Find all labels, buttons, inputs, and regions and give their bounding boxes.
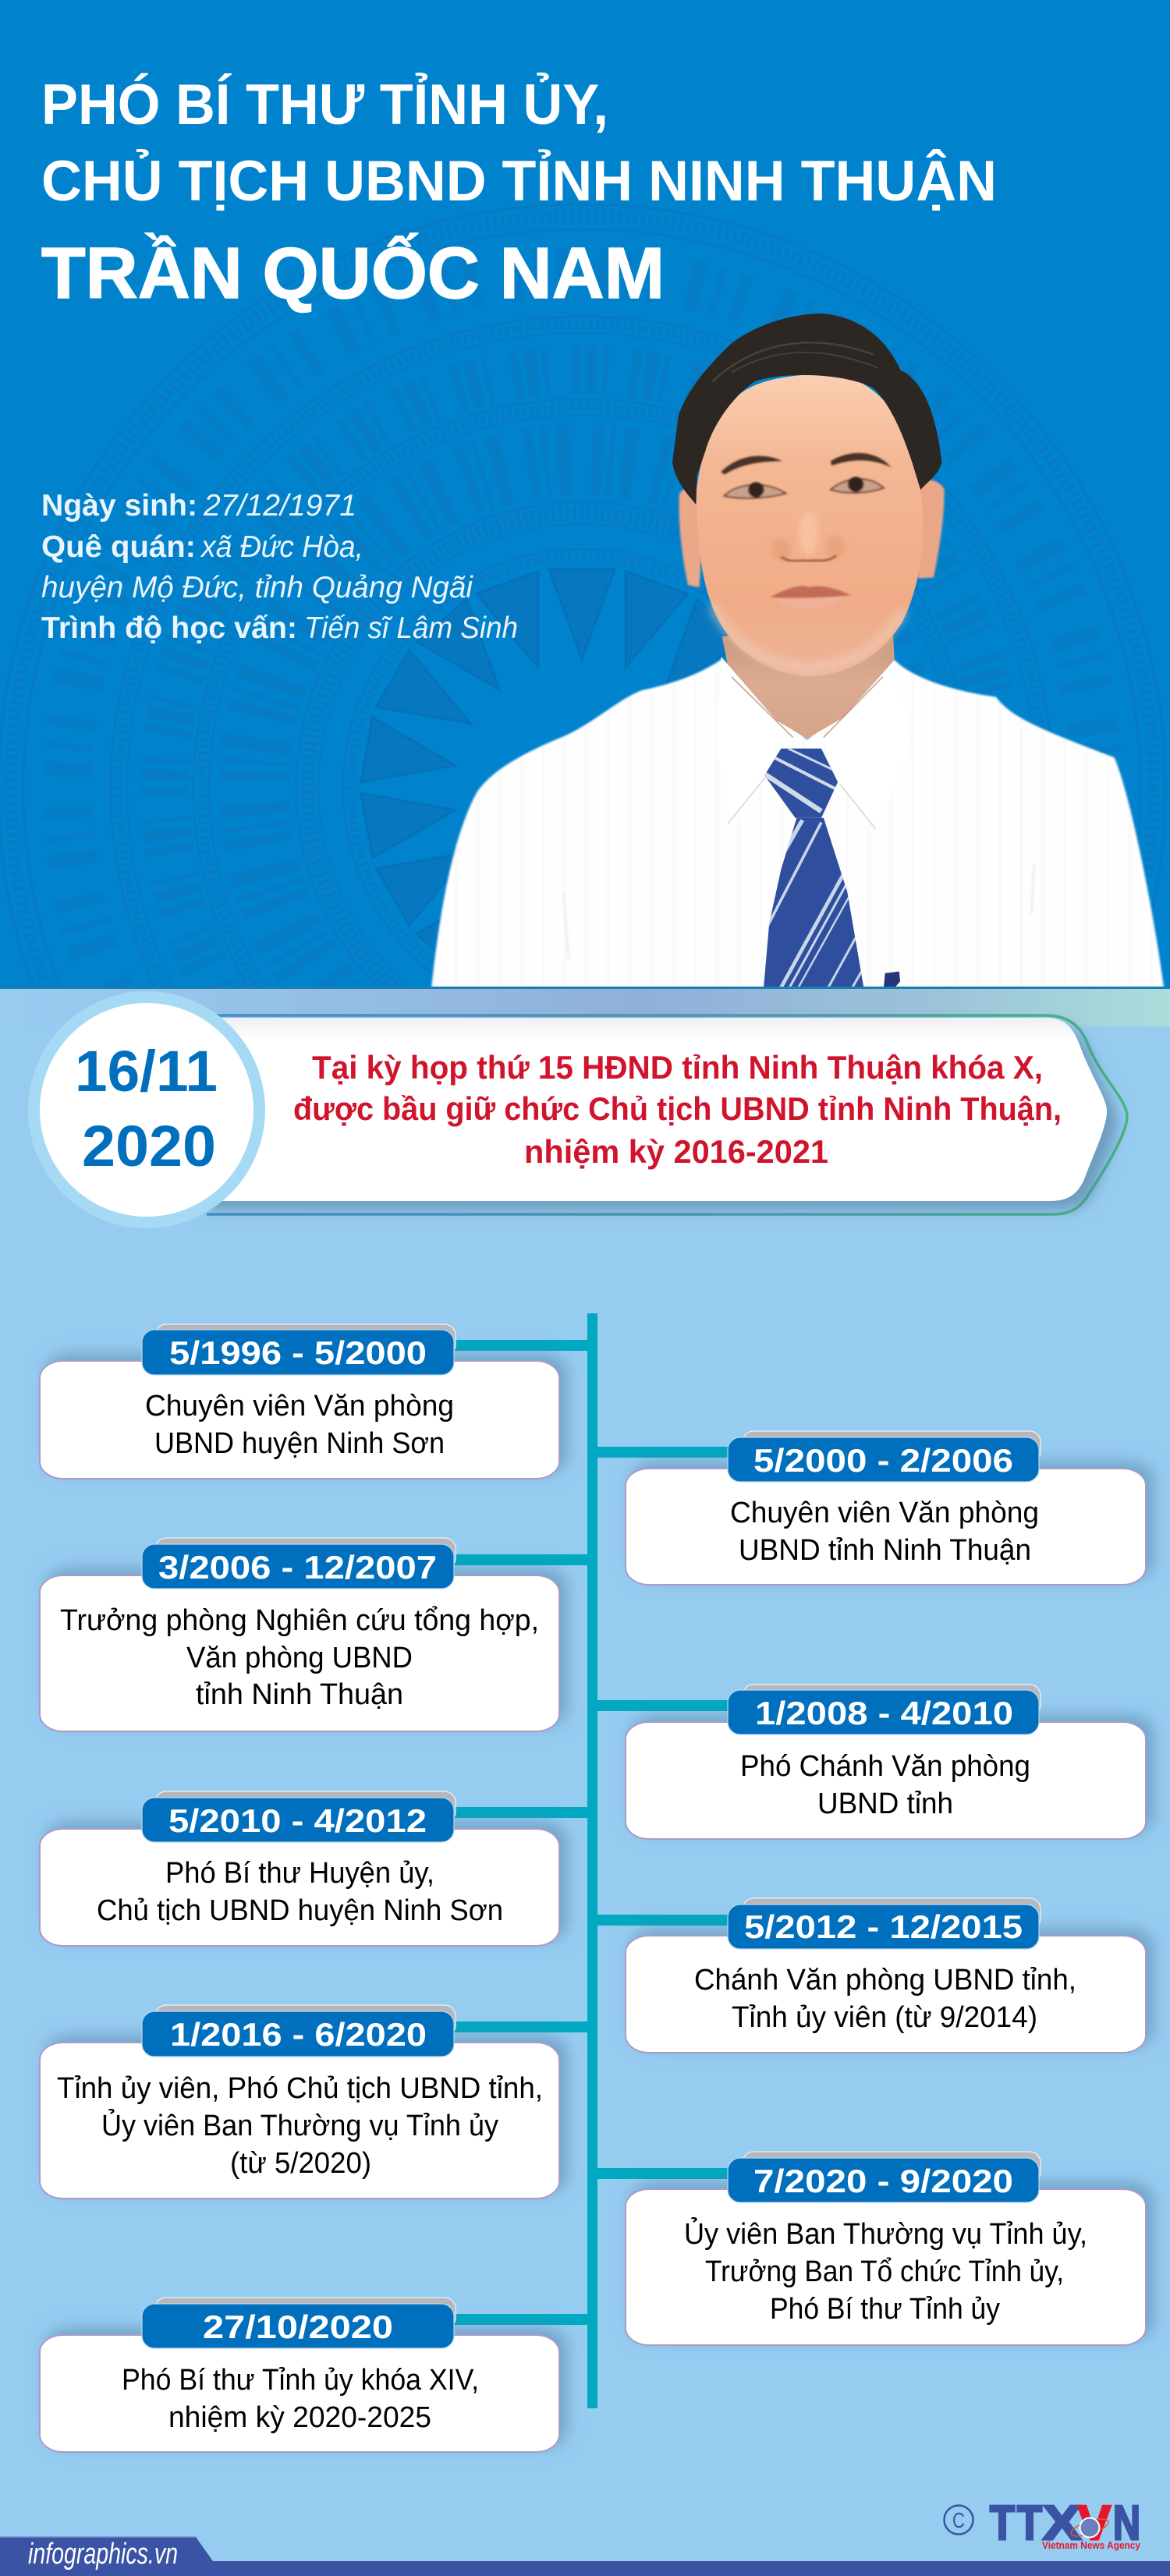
card: 5/2000 - 2/2006: Chuyên viên Văn phòng xyxy=(730,1497,1039,1529)
card: 1/2016 - 6/2020: (từ 5/2020) xyxy=(230,2147,371,2180)
card: 5/1996 - 5/2000 xyxy=(40,1324,559,1479)
card: 3/2006 - 12/2007: tỉnh Ninh Thuận xyxy=(196,1678,403,1711)
banner text: Tại kỳ họp thứ 15 HĐND tỉnh Ninh Thuận khóa X, xyxy=(312,1049,1043,1086)
card: 27/10/2020: nhiệm kỳ 2020-2025 xyxy=(168,2401,431,2434)
card: 1/2016 - 6/2020 xyxy=(40,2005,559,2199)
shirt xyxy=(431,659,1164,988)
card: 3/2006 - 12/2007: Trưởng phòng Nghiên cứu tổng hợp, xyxy=(60,1604,539,1637)
personal details: xã Đức Hòa, xyxy=(200,530,363,564)
agency letters xyxy=(990,2496,1140,2550)
card: 5/2010 - 4/2012: 5/2010 - 4/2012 xyxy=(168,1802,427,1839)
card: 7/2020 - 9/2020: 7/2020 - 9/2020 xyxy=(753,2163,1013,2199)
card: 1/2008 - 4/2010: 1/2008 - 4/2010 xyxy=(755,1695,1013,1731)
banner: election event xyxy=(28,991,1127,1228)
copyright mark xyxy=(944,2505,973,2535)
agency letters: T xyxy=(1017,2496,1042,2550)
bronze drum pattern xyxy=(0,203,1167,987)
card: 5/2000 - 2/2006: UBND tỉnh Ninh Thuận xyxy=(739,1534,1031,1567)
agency letters: T xyxy=(990,2496,1015,2550)
face xyxy=(697,374,923,677)
mouth xyxy=(770,586,850,608)
personal details: 27/12/1971 xyxy=(203,489,356,523)
card: 1/2016 - 6/2020: Tỉnh ủy viên, Phó Chủ tịch UBND tỉnh, xyxy=(57,2072,543,2105)
title xyxy=(41,73,997,314)
card: 7/2020 - 9/2020: Ủy viên Ban Thường vụ Tỉnh ủy, xyxy=(684,2216,1087,2251)
card: 1/2008 - 4/2010: UBND tỉnh xyxy=(817,1788,953,1820)
card: 7/2020 - 9/2020 xyxy=(626,2152,1146,2345)
card: 7/2020 - 9/2020: Phó Bí thư Tỉnh ủy xyxy=(770,2293,1000,2326)
hair xyxy=(672,314,941,505)
footer bar xyxy=(0,2537,1170,2576)
agency letters: X xyxy=(1043,2496,1081,2550)
card: 7/2020 - 9/2020: Trưởng Ban Tổ chức Tỉnh ủy, xyxy=(705,2255,1064,2288)
card: 5/2012 - 12/2015: Tỉnh ủy viên (từ 9/2014) xyxy=(732,2001,1037,2034)
title: CHỦ TỊCH UBND TỈNH NINH THUẬN xyxy=(41,150,997,213)
top band below header xyxy=(0,987,1170,1026)
date circle: 16/11 xyxy=(75,1039,218,1104)
globe xyxy=(1069,2516,1110,2539)
title: TRẦN QUỐC NAM xyxy=(41,232,665,314)
card: 5/2010 - 4/2012: Chủ tịch UBND huyện Ninh Sơn xyxy=(97,1894,503,1927)
personal details: Quê quán: xyxy=(41,530,196,564)
card: 5/2000 - 2/2006 xyxy=(626,1431,1146,1585)
header panel xyxy=(0,0,1170,987)
banner text xyxy=(293,1049,1062,1170)
card: 5/2012 - 12/2015 xyxy=(626,1898,1146,2053)
date circle: 2020 xyxy=(82,1114,216,1178)
footer bar: infographics.vn xyxy=(28,2538,178,2571)
eyebrows xyxy=(721,453,892,474)
personal details xyxy=(41,489,518,645)
card: 1/2016 - 6/2020: Ủy viên Ban Thường vụ Tỉnh ủy xyxy=(101,2108,498,2142)
portrait photo xyxy=(431,314,1164,1026)
card: 1/2008 - 4/2010: Phó Chánh Văn phòng xyxy=(740,1750,1030,1783)
ears xyxy=(679,480,945,587)
eyes xyxy=(725,477,884,498)
card: 27/10/2020: 27/10/2020 xyxy=(203,2308,393,2345)
nose xyxy=(771,512,845,562)
personal details: Ngày sinh: xyxy=(41,489,197,523)
card: 27/10/2020: Phó Bí thư Tỉnh ủy khóa XIV, xyxy=(122,2364,479,2397)
banner body xyxy=(195,1018,1107,1201)
card: 1/2008 - 4/2010 xyxy=(626,1685,1146,1839)
card: 5/1996 - 5/2000: Chuyên viên Văn phòng xyxy=(145,1390,454,1423)
logo: TTXVN: Vietnam News Agency xyxy=(1042,2539,1141,2551)
card: 5/2010 - 4/2012: Phó Bí thư Huyện ủy, xyxy=(165,1857,434,1890)
tie xyxy=(764,749,864,987)
agency letters: V xyxy=(1078,2496,1111,2550)
personal details: Tiến sĩ Lâm Sinh xyxy=(304,611,518,645)
card: 3/2006 - 12/2007 xyxy=(40,1538,559,1731)
agency letters: N xyxy=(1113,2496,1140,2550)
personal details: huyện Mộ Đức, tỉnh Quảng Ngãi xyxy=(41,571,473,604)
logo: TTXVN xyxy=(944,2496,1141,2551)
neck xyxy=(722,618,895,739)
banner outline xyxy=(207,1015,1127,1214)
card: 5/2012 - 12/2015: 5/2012 - 12/2015 xyxy=(744,1908,1023,1945)
personal details: Trình độ học vấn: xyxy=(41,611,297,645)
card: 3/2006 - 12/2007: Văn phòng UBND xyxy=(186,1642,413,1674)
banner text: nhiệm kỳ 2016-2021 xyxy=(524,1133,828,1170)
date circle xyxy=(28,991,265,1228)
card: 3/2006 - 12/2007: 3/2006 - 12/2007 xyxy=(158,1549,437,1586)
card: 5/2010 - 4/2012 xyxy=(40,1791,559,1946)
card: 1/2016 - 6/2020: 1/2016 - 6/2020 xyxy=(170,2016,427,2053)
card: 5/2000 - 2/2006: 5/2000 - 2/2006 xyxy=(753,1442,1013,1479)
card: 27/10/2020 xyxy=(40,2298,559,2452)
banner text: được bầu giữ chức Chủ tịch UBND tỉnh Ninh Thuận, xyxy=(293,1090,1062,1127)
card: 5/1996 - 5/2000: UBND huyện Ninh Sơn xyxy=(154,1427,445,1460)
pen xyxy=(884,972,900,988)
title: PHÓ BÍ THƯ TỈNH ỦY, xyxy=(41,73,608,136)
card: 5/1996 - 5/2000: 5/1996 - 5/2000 xyxy=(169,1334,427,1371)
copyright mark: C xyxy=(952,2508,965,2532)
timeline spine xyxy=(587,1313,597,2408)
card: 5/2012 - 12/2015: Chánh Văn phòng UBND tỉnh, xyxy=(694,1964,1076,1997)
timeline connectors xyxy=(452,1340,730,2325)
collar xyxy=(718,657,911,829)
jaw highlight xyxy=(713,605,904,668)
